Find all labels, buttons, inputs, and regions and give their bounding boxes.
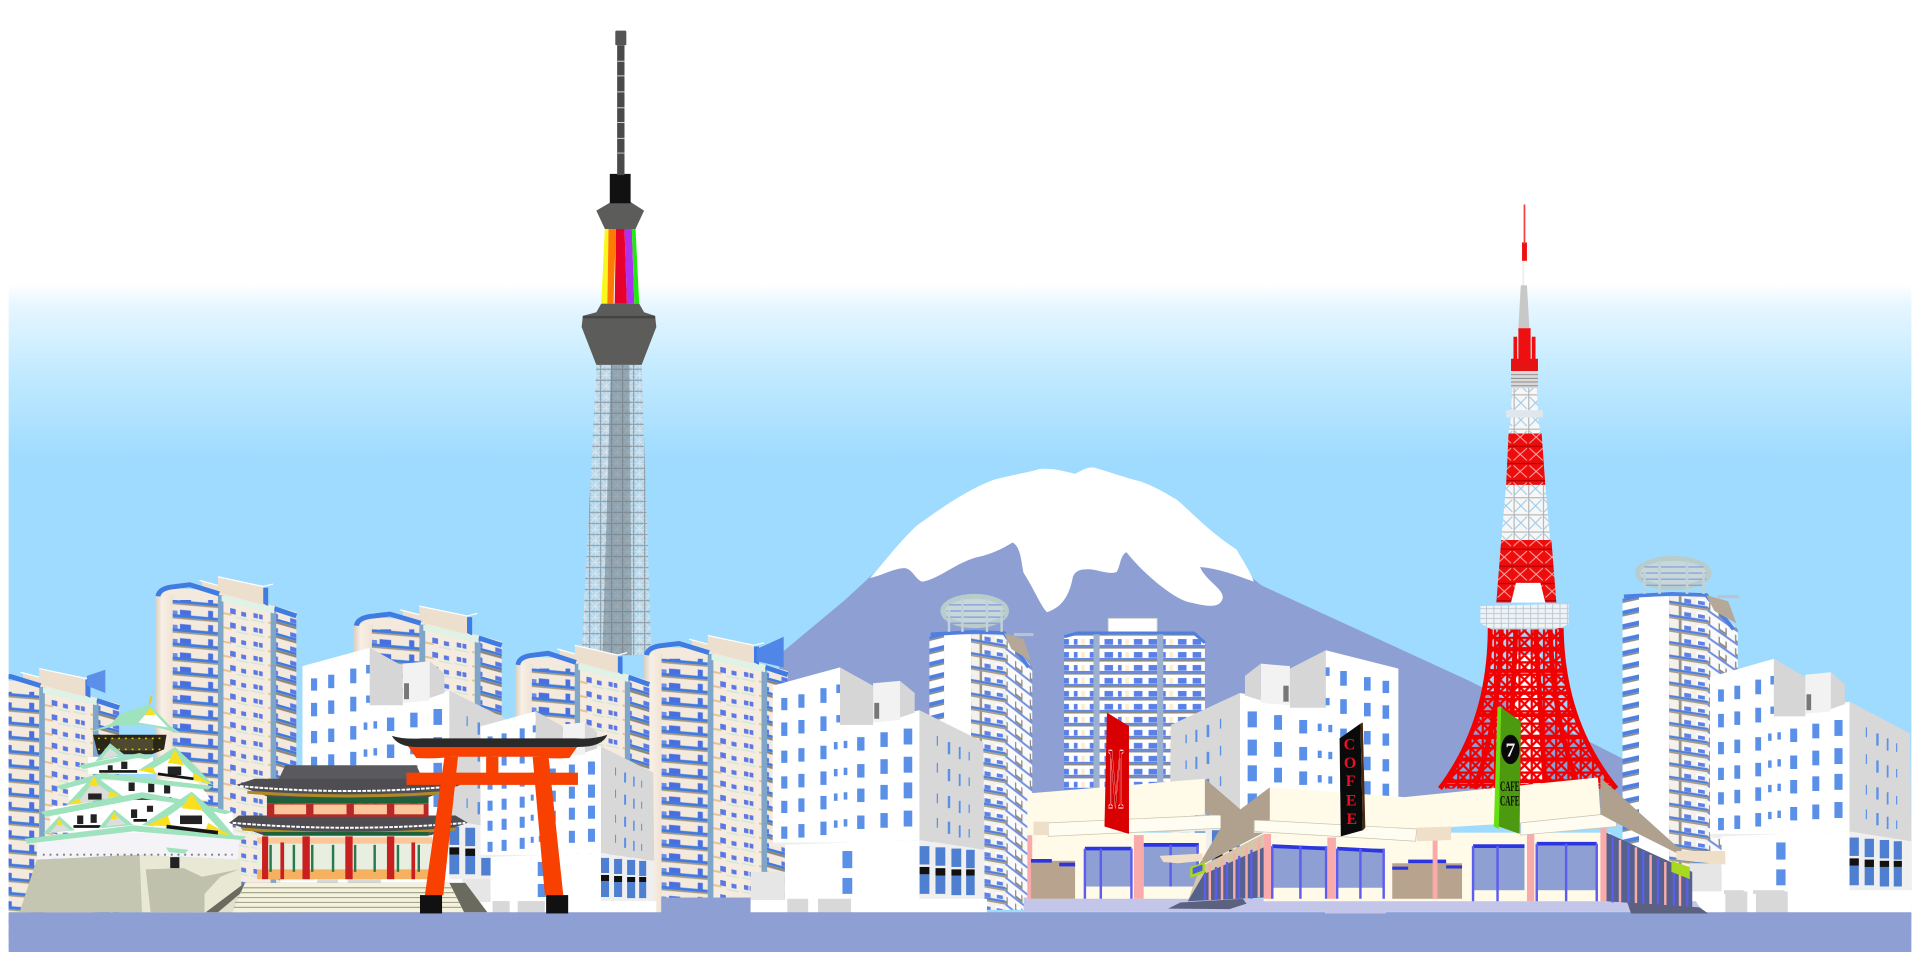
sign: cafe 7: CAFE	[1500, 794, 1520, 810]
sign: coffee: E	[1347, 811, 1357, 828]
castle stone base	[20, 855, 242, 912]
tower ring section	[1511, 328, 1538, 388]
canopy left	[1160, 853, 1205, 878]
tan roof left	[1198, 779, 1270, 867]
castle black top floor	[93, 735, 167, 754]
castle white band	[37, 830, 240, 860]
apartment block E roof tank	[757, 637, 784, 667]
skytree lower deck	[582, 304, 656, 365]
castle gable big lower right	[142, 792, 235, 837]
apartment block D	[516, 645, 649, 923]
skytree rainbow column	[601, 228, 639, 304]
palace steps	[233, 883, 464, 912]
apartment block E	[644, 636, 788, 913]
tower lower legs	[1440, 628, 1616, 789]
castle floors	[50, 757, 233, 833]
castle gable small lower left	[43, 816, 75, 833]
apartment tower left	[929, 596, 1033, 910]
castle top gable	[138, 696, 168, 727]
torii lintel	[408, 746, 578, 758]
slanted glass front left	[1188, 834, 1264, 901]
white office building center	[751, 667, 987, 913]
palace upper hall	[267, 796, 429, 817]
palace lower hall	[257, 834, 432, 879]
castle gable mid left	[66, 775, 123, 805]
sign: coffee: F	[1346, 773, 1355, 790]
mount fuji	[779, 468, 1641, 808]
white office building 1	[280, 648, 517, 894]
sign: cafe 7: 7	[1506, 741, 1516, 762]
castle gable upper left	[95, 743, 125, 762]
palace lower roof	[229, 816, 468, 835]
apartment tower right	[1623, 558, 1739, 872]
castle gable small lower mid	[98, 809, 133, 828]
castle gable upper right	[138, 747, 213, 785]
canopy right	[1671, 851, 1725, 879]
slanted glass front right	[1607, 833, 1692, 907]
torii pillars	[425, 757, 458, 895]
apartment block A roof tank	[87, 670, 105, 693]
tower antenna	[1518, 285, 1529, 328]
apartment block B	[156, 577, 296, 912]
white office building right	[1689, 659, 1914, 905]
cafe center wall	[1264, 828, 1610, 901]
pavement	[1024, 898, 1702, 913]
torii crossbar	[407, 773, 578, 785]
cafe center parapet	[1270, 778, 1600, 829]
torii feet	[420, 895, 442, 913]
sign: cafe 7	[1494, 707, 1521, 834]
entrance steps	[1168, 899, 1247, 909]
palace side walls	[206, 883, 487, 912]
cafe left wall	[1027, 833, 1206, 899]
torii gate	[392, 735, 607, 913]
castle gate door	[166, 847, 188, 868]
ground	[9, 912, 1911, 952]
white office building behind cafe	[1167, 650, 1422, 896]
sign: coffee: E	[1346, 793, 1357, 810]
sign: red M: M	[1108, 731, 1124, 828]
castle eaves	[24, 704, 246, 844]
sign: coffee: C	[1344, 736, 1355, 753]
sign: cafe 7: CAFE	[1500, 779, 1520, 795]
tower main deck	[1480, 604, 1569, 629]
palace gate	[206, 765, 487, 912]
center apartment tower	[1064, 618, 1205, 791]
palace top roof	[236, 765, 460, 797]
sign: coffee: O	[1344, 755, 1356, 772]
cafe row	[1024, 707, 1725, 913]
skytree upper deck	[596, 202, 644, 229]
tokyo skytree	[582, 31, 656, 655]
ground strip behind center office	[661, 898, 751, 913]
skytree antenna	[617, 45, 624, 175]
torii top beam	[392, 735, 607, 747]
tan roof right	[1600, 778, 1692, 861]
white office building 2	[462, 711, 656, 913]
tokyo tower	[1440, 204, 1616, 789]
sign: red M	[1104, 713, 1129, 834]
apartment block C	[354, 606, 502, 884]
cafe left parapet	[1027, 779, 1205, 835]
apartment block A	[0, 669, 119, 947]
skytree lattice shaft	[582, 365, 651, 655]
right office base	[1693, 891, 1911, 913]
snow cap	[870, 468, 1254, 612]
sign: coffee	[1340, 722, 1365, 836]
osaka castle	[20, 696, 246, 912]
